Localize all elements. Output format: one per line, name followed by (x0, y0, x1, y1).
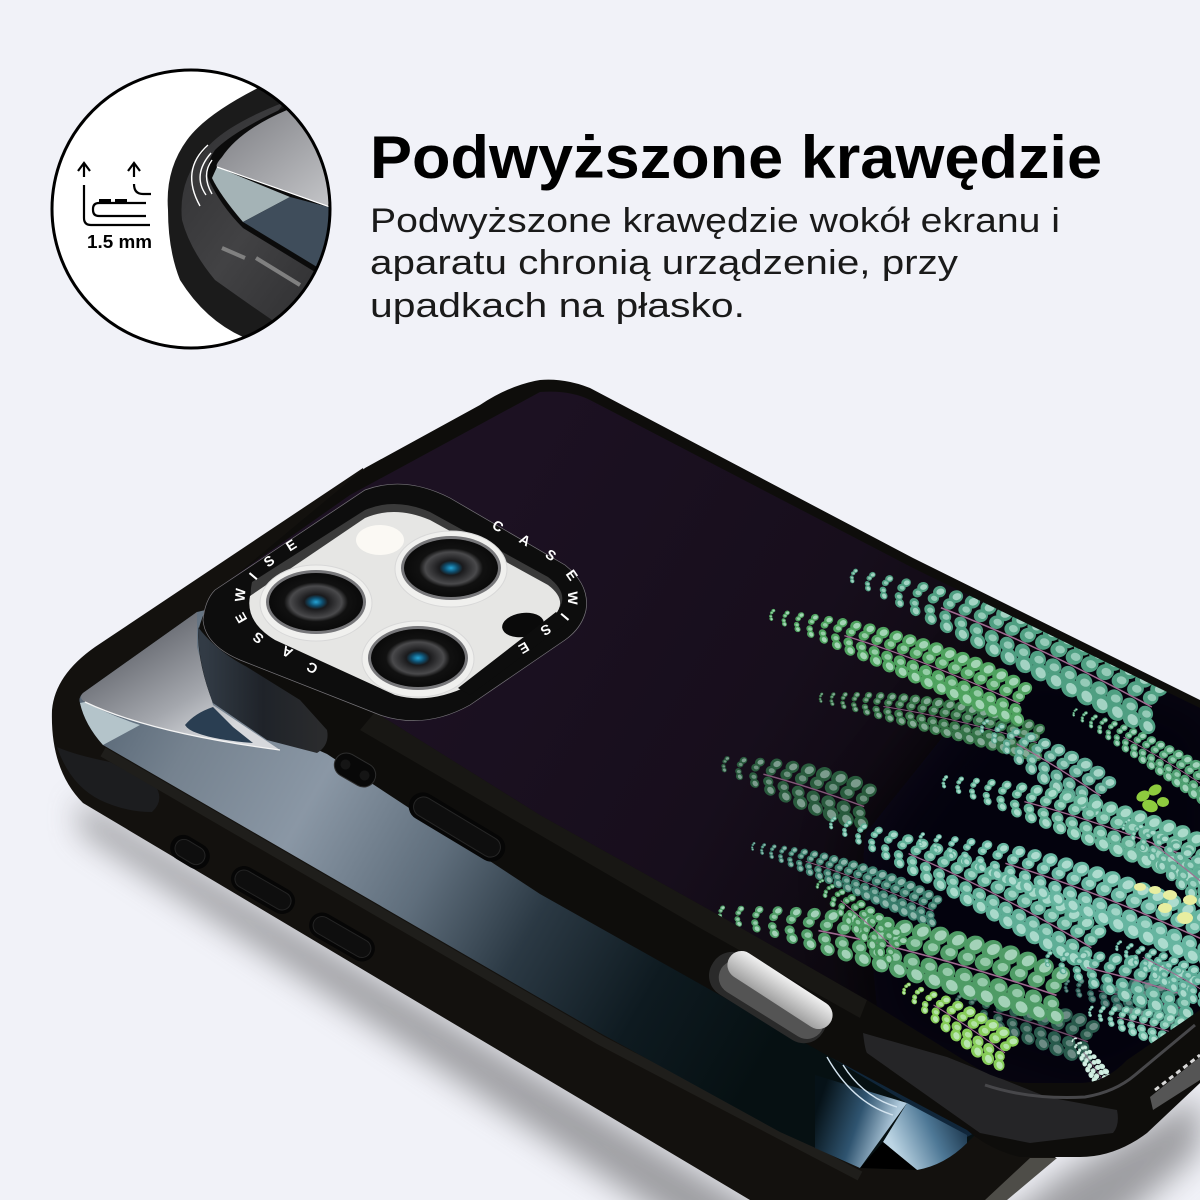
brand lettering on camera ring: E (516, 639, 532, 657)
brand lettering on camera ring: S (250, 629, 266, 647)
brand lettering on camera ring: S (538, 621, 554, 639)
circle outline (52, 70, 330, 348)
close-up of case corner (168, 80, 340, 337)
frond: rear green (818, 692, 1045, 762)
screen: grey wallpaper corner (81, 612, 280, 750)
port teeth (1155, 1055, 1200, 1090)
frond: white tip (1072, 1037, 1110, 1082)
frond: rear dim muted right (1064, 978, 1188, 1026)
screen dark blue (243, 197, 328, 266)
frond: top long (850, 568, 1167, 734)
screen: left glow wedge (815, 1075, 907, 1168)
brand lettering on camera ring: A (517, 531, 533, 549)
frond: pale centre (980, 718, 1116, 817)
brand lettering on camera ring (231, 517, 581, 677)
corner translucent band (182, 104, 314, 320)
flash (356, 525, 404, 555)
yellow-green leaf cluster (1136, 784, 1169, 812)
brand lettering on camera ring: E (283, 536, 299, 554)
frond: main right (918, 832, 1200, 964)
front phone right corner, translucent carbon (863, 1033, 1118, 1143)
frond: far right (1115, 940, 1200, 1007)
port window at right corner (1150, 1057, 1200, 1110)
heading: Podwyższone krawędzie (370, 124, 1102, 191)
frond: right upper second (1121, 818, 1200, 908)
camera module plate (249, 512, 560, 698)
screen: right glow wedge (883, 1103, 967, 1170)
circle base (52, 70, 330, 348)
microphone hole (501, 610, 545, 640)
frond: rear teal left (751, 842, 942, 928)
brand lettering on camera ring: C (490, 517, 506, 535)
fern dark backdrop (892, 709, 1030, 906)
frond: green second (769, 608, 1032, 726)
screen: black triangle (860, 1142, 917, 1170)
brand lettering on camera ring: W (231, 587, 249, 602)
back phone translucent right end (985, 1158, 1057, 1200)
body line 3: upadkach na płasko. (370, 287, 745, 325)
brand lettering on camera ring: A (279, 643, 295, 661)
screen grey (217, 110, 340, 207)
charging port surround (701, 944, 835, 1052)
arrow left (78, 163, 90, 177)
raised edge arcs (192, 145, 212, 206)
fern artwork (708, 554, 1200, 1110)
screen: white curve (85, 702, 280, 750)
height diagram icon (78, 163, 151, 225)
back phone bumper (52, 468, 1100, 1200)
body line 2: aparatu chronią urządzenie, przy (370, 244, 958, 282)
back phone bumper corner, translucent carbon (57, 747, 159, 812)
brand lettering on camera ring: S (261, 552, 277, 570)
back phone: lower case seen from the screen side (52, 468, 1100, 1200)
corner bumper (168, 88, 284, 337)
screen: dark wave shape (185, 707, 253, 743)
back phone volume down button (304, 908, 380, 966)
phone bumps (99, 199, 127, 203)
frond: lower right pale (1088, 1006, 1186, 1044)
camera hook (134, 184, 151, 194)
camera lens left (260, 565, 372, 641)
brand lettering on camera ring: E (232, 610, 250, 626)
body line 1: Podwyższone krawędzie wokół ekranu i (370, 202, 1060, 240)
screen pale blue (212, 167, 290, 222)
frond: middle big (829, 816, 1106, 972)
drop shadow under phones (80, 800, 1200, 1200)
band highlight (222, 248, 300, 285)
detail circle: raised edge close-up (52, 70, 340, 348)
front phone left corner, translucent carbon (198, 627, 328, 753)
arrow right (128, 163, 140, 177)
brand lettering on camera ring: C (304, 659, 320, 677)
inner shell (93, 203, 146, 216)
front phone corner gloss (985, 1025, 1195, 1098)
ring lower right overlap over hole (458, 612, 568, 695)
back phone small button (165, 830, 215, 874)
front phone power button (404, 787, 510, 867)
brand lettering on camera ring: E (563, 567, 581, 583)
front phone side rail highlight (360, 712, 867, 1018)
front phone: upper case seen from the back (198, 380, 1200, 1157)
brand lettering on camera ring: I (558, 610, 572, 624)
back phone screen (79, 560, 980, 1170)
measurement label: 1.5 mm (87, 232, 152, 252)
front phone outer body (198, 380, 1200, 1157)
back phone rim band along the screen (103, 752, 860, 1176)
frond: short lower (816, 879, 908, 964)
brand lettering on camera ring: W (565, 591, 581, 605)
back phone volume up button (226, 861, 300, 919)
brand lettering on camera ring: S (543, 546, 559, 564)
frond: upper middle (942, 775, 1200, 888)
screen: pale blue corner (80, 702, 140, 745)
frond: bright green (902, 982, 1019, 1071)
frond: bottom right (1044, 951, 1198, 1020)
camera surround (203, 484, 587, 721)
camera ring (203, 484, 587, 721)
slot with two holes (330, 749, 380, 791)
screen: upper dark blue band (830, 1057, 980, 1137)
frond: rear dim muted (955, 994, 1100, 1064)
camera lens top right (395, 531, 507, 607)
frond: long lower (718, 906, 1070, 1024)
screen black rim (208, 108, 324, 271)
camera inner bevel (251, 504, 562, 690)
charging port (722, 946, 838, 1034)
frond: right upper (1072, 708, 1200, 804)
outer bracket (84, 185, 150, 225)
back panel face (215, 392, 1200, 1083)
screen white line (217, 167, 330, 207)
brand lettering on camera ring: I (246, 569, 260, 583)
camera lens bottom (362, 621, 474, 697)
screen: light lines (827, 1057, 897, 1115)
body text (370, 202, 1060, 325)
frond: dim left (721, 756, 877, 830)
pale yellow leaves (1134, 883, 1197, 924)
